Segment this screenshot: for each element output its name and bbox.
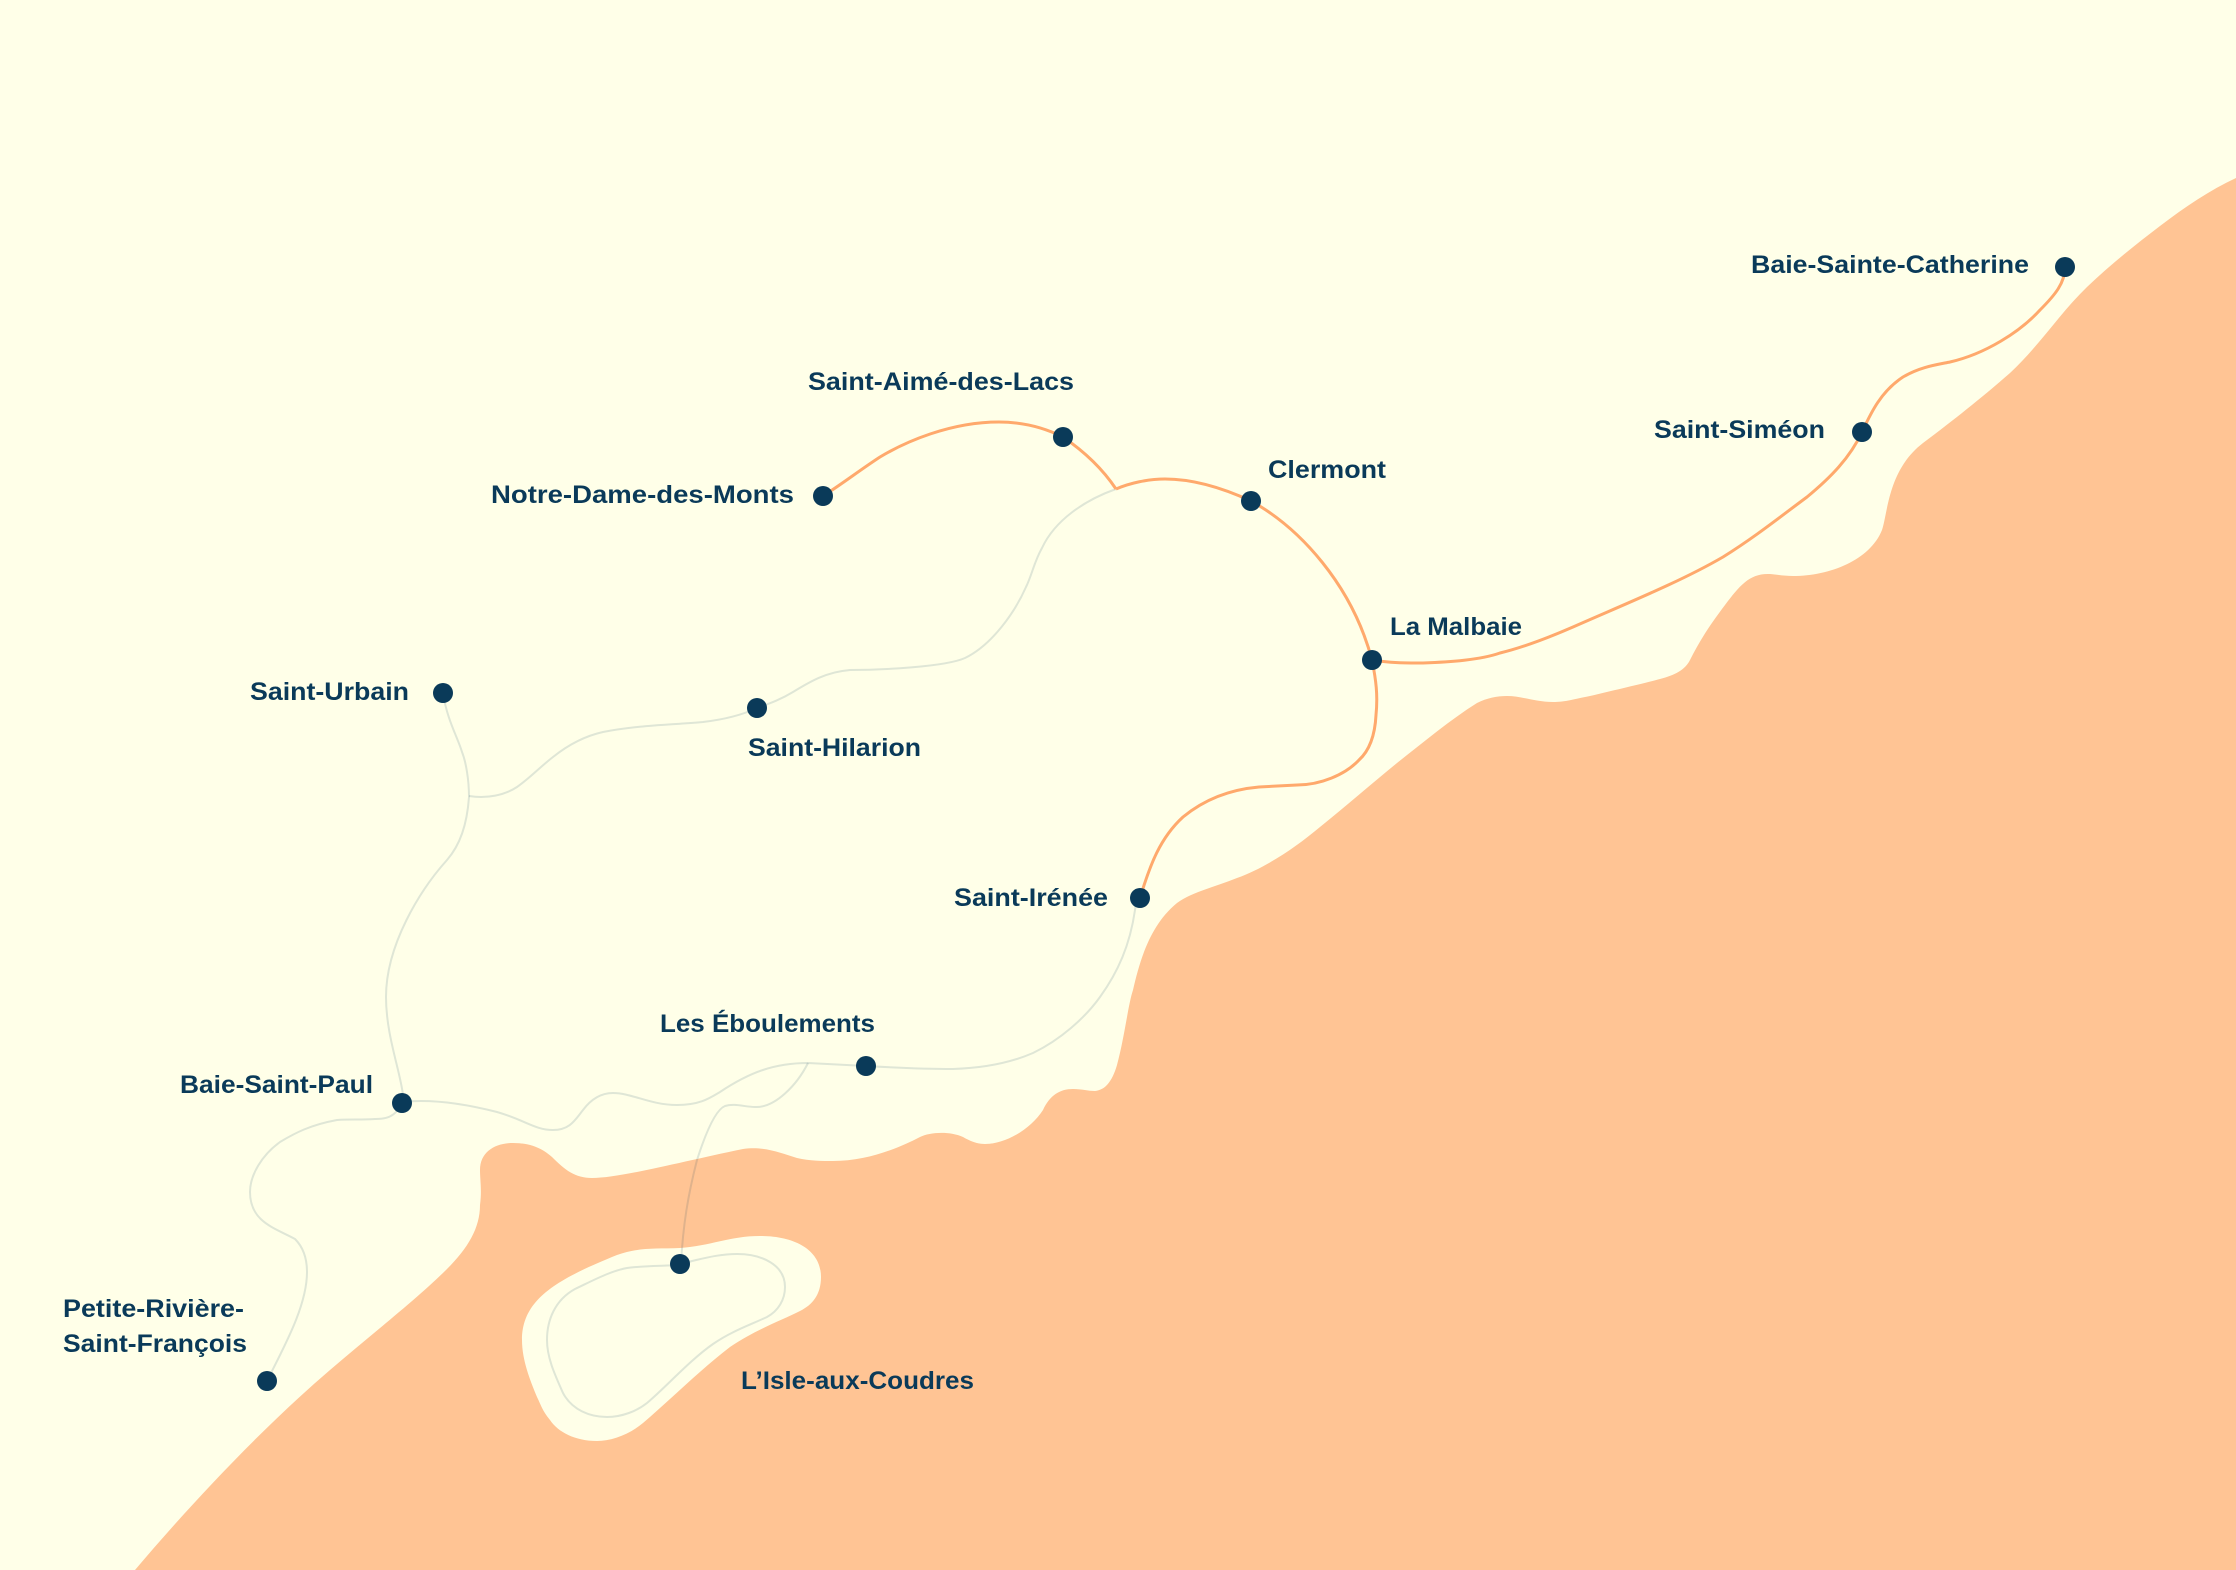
label: Saint-Irénée: Saint-Irénée xyxy=(954,884,1108,912)
road: Baie-Saint-Paul to Petite-Rivière-Saint-François xyxy=(250,1103,402,1375)
road: junction to Saint-Hilarion xyxy=(469,489,1116,797)
route: Notre-Dame-des-Monts to Saint-Aimé-des-Lacs xyxy=(823,422,1063,496)
route: La Malbaie to Saint-Irénée xyxy=(1140,660,1377,898)
label: Baie-Saint-Paul: Baie-Saint-Paul xyxy=(180,1071,373,1099)
route: junction to La Malbaie xyxy=(1116,479,1372,660)
label: Saint-Siméon: Saint-Siméon xyxy=(1654,416,1825,444)
main route xyxy=(823,267,2065,898)
road: Saint-Urbain to Baie-Saint-Paul xyxy=(386,693,469,1095)
secondary roads xyxy=(250,489,1137,1417)
route: La Malbaie to Saint-Siméon xyxy=(1372,432,1862,663)
route: Saint-Aimé-des-Lacs to junction xyxy=(1063,437,1116,489)
label: Notre-Dame-des-Monts: Notre-Dame-des-Monts xyxy=(491,481,794,509)
label: Petite-Rivière-Saint-François: Petite-Rivière- xyxy=(63,1295,244,1323)
town labels xyxy=(63,251,2029,1395)
label: Clermont: Clermont xyxy=(1268,456,1387,484)
label: Saint-Urbain: Saint-Urbain xyxy=(250,678,409,706)
label: Saint-Aimé-des-Lacs: Saint-Aimé-des-Lacs xyxy=(808,368,1074,396)
island: L'Isle-aux-Coudres xyxy=(522,1236,821,1441)
label: Saint-Hilarion: Saint-Hilarion xyxy=(748,734,921,762)
road: ferry branch to L'Isle-aux-Coudres xyxy=(681,1063,808,1264)
road: island loop xyxy=(547,1254,785,1417)
label: L'Isle-aux-Coudres: L’Isle-aux-Coudres xyxy=(741,1367,974,1395)
town markers xyxy=(257,257,2075,1391)
label: Baie-Sainte-Catherine: Baie-Sainte-Catherine xyxy=(1751,251,2029,279)
label: La Malbaie: La Malbaie xyxy=(1390,613,1522,641)
road: Les Éboulements to Saint-Irénée xyxy=(866,898,1137,1069)
label: Les Éboulements: Les Éboulements xyxy=(660,1009,875,1038)
route: Saint-Siméon to Baie-Sainte-Catherine xyxy=(1862,267,2065,432)
label: Petite-Rivière-Saint-François xyxy=(63,1295,247,1358)
label: Petite-Rivière-Saint-François: Saint-François xyxy=(63,1330,247,1358)
road: Baie-Saint-Paul to Les Éboulements xyxy=(402,1063,866,1130)
